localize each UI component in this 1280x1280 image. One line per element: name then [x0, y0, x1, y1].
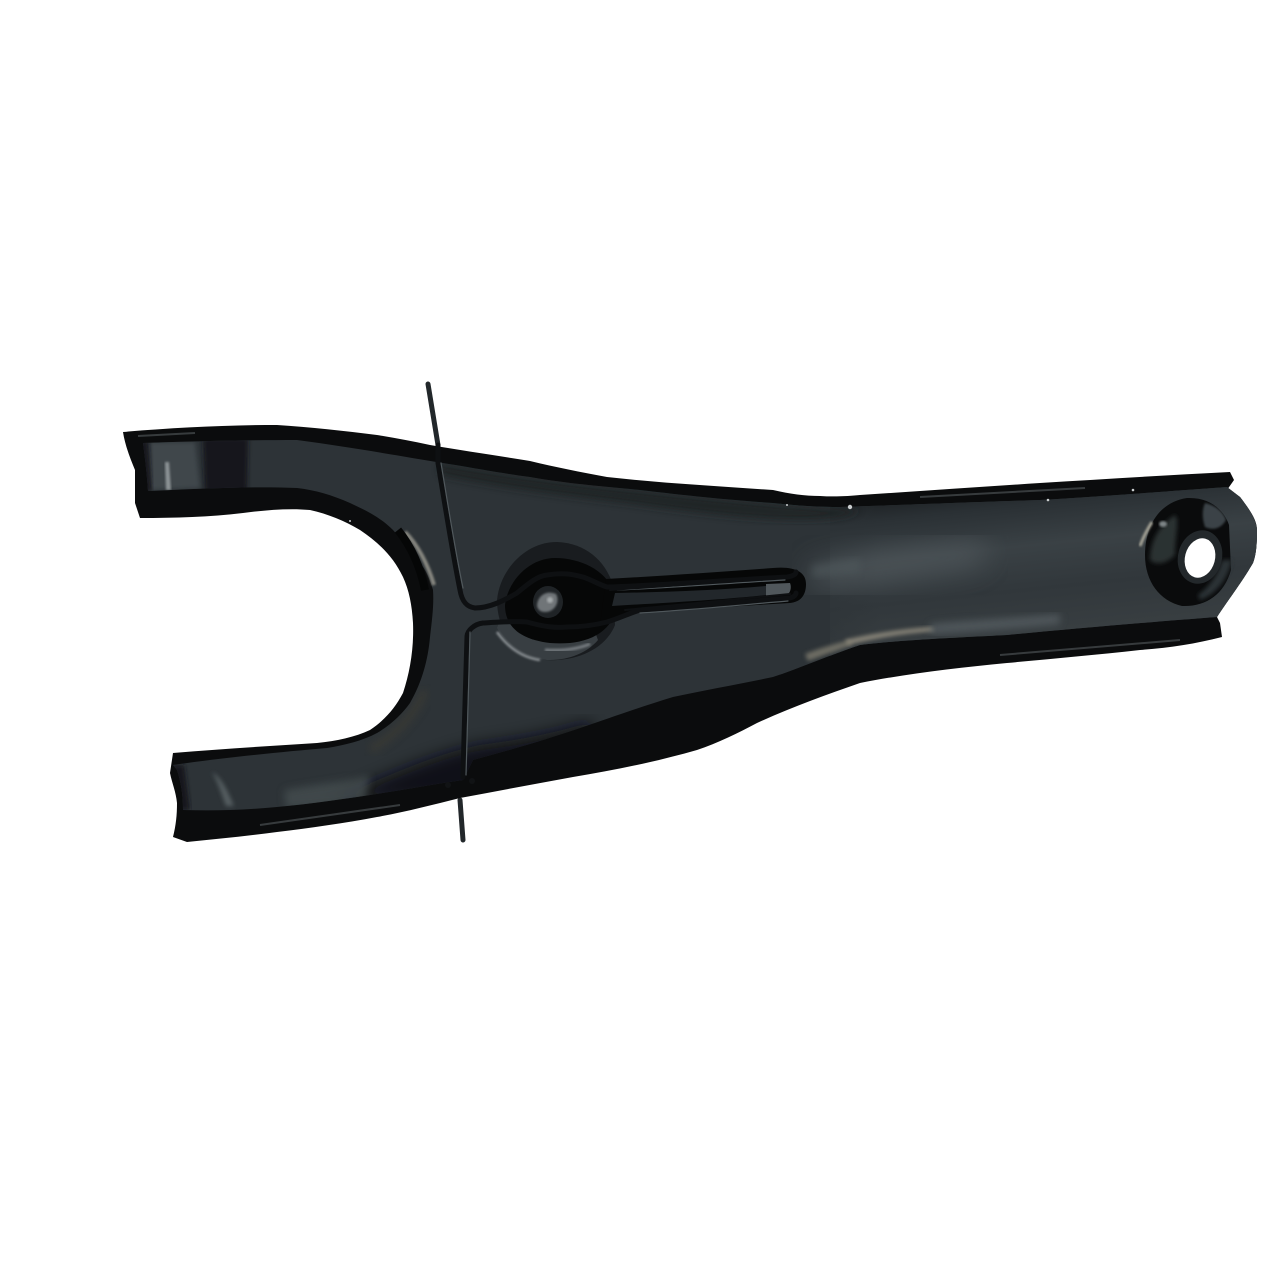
hole	[1180, 535, 1220, 581]
rim top glints	[138, 433, 1180, 825]
wire sheen	[441, 463, 788, 775]
blend arm to web	[780, 504, 802, 674]
upper tine dark block	[203, 438, 248, 492]
clutch fork	[120, 384, 1270, 842]
boss lower crescent	[497, 618, 598, 660]
upper crease shadow	[440, 463, 860, 520]
arm middle sheen	[810, 540, 990, 590]
eye end	[1140, 498, 1232, 606]
upper tine gloss	[150, 442, 200, 490]
hole ring	[1172, 525, 1228, 589]
arm shading	[830, 480, 1270, 660]
lower tine sheen	[284, 775, 370, 808]
painted face	[143, 440, 1257, 810]
upper tine glint	[165, 462, 171, 490]
bolt shine	[547, 597, 553, 603]
upper tine tip dark	[143, 443, 154, 491]
wire spring ends	[428, 384, 463, 840]
slot	[600, 568, 806, 625]
arc glint	[405, 532, 434, 585]
base face colour	[143, 440, 1257, 810]
wire rivets	[445, 778, 475, 788]
arc glint dark edge	[398, 530, 425, 590]
slot end glow	[812, 564, 838, 576]
crescent light edge	[497, 632, 540, 660]
wire spring	[438, 445, 796, 777]
upper wire dark	[438, 445, 796, 608]
boss interior	[505, 558, 613, 643]
slot tab end	[766, 583, 791, 596]
dimple upper right reflect	[1203, 503, 1226, 529]
fork silhouette	[123, 425, 1257, 842]
boss ring	[497, 542, 615, 660]
lower tine tip dark	[170, 765, 190, 810]
streak arm lower extension	[930, 614, 1060, 634]
rim specks	[349, 489, 1134, 522]
outer glint	[1140, 522, 1152, 546]
wire inner pair	[610, 577, 790, 610]
dimple left reflect	[1150, 515, 1177, 563]
lower dark fade left	[363, 718, 595, 796]
crescent light edge 2	[545, 644, 590, 650]
bolt	[533, 586, 563, 618]
boss and slot	[497, 542, 806, 660]
arc bronze reflections	[370, 690, 425, 750]
streak web lower	[805, 640, 852, 661]
lower tine glint	[212, 772, 234, 806]
streak arm lower	[845, 627, 935, 645]
bolt glint	[537, 593, 558, 612]
eye dimple	[1145, 498, 1231, 606]
dimple glint	[1159, 521, 1167, 527]
dimple lower right reflect	[1198, 560, 1232, 600]
photo: clutch release fork	[123, 382, 1257, 842]
slot tab	[612, 586, 766, 606]
lower wire dark	[463, 593, 796, 777]
